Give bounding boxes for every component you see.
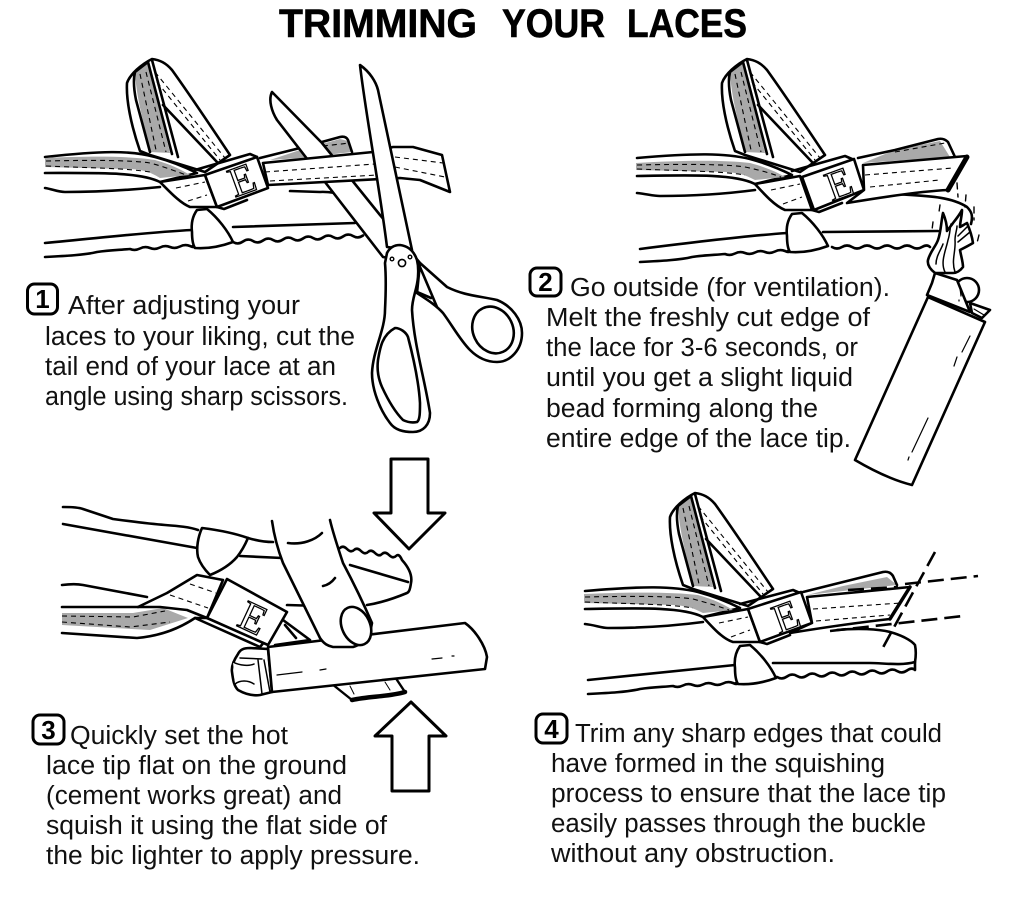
text: step 1 bbox=[45, 292, 355, 411]
badge: number 1 bbox=[28, 284, 58, 314]
panel: step 4 bbox=[536, 493, 978, 868]
text: step 3: (cement works great) and bbox=[46, 782, 342, 810]
title: LACES bbox=[627, 2, 747, 46]
text: step 2: Melt the freshly cut edge of bbox=[546, 304, 871, 332]
text: step 3: lace tip flat on the ground bbox=[46, 752, 347, 780]
badge: number 4 bbox=[536, 714, 567, 744]
text: step 2: entire edge of the lace tip. bbox=[546, 425, 851, 453]
panel: step 1 bbox=[28, 59, 522, 432]
icon: lighter flat bbox=[232, 623, 487, 695]
panel: step 3 bbox=[33, 459, 487, 870]
buckle letter: E bbox=[222, 155, 262, 207]
trim guide lines bbox=[830, 552, 978, 653]
title bbox=[279, 2, 747, 46]
text: step 2: Go outside (for ventilation). bbox=[570, 274, 890, 302]
panel: step 2 bbox=[530, 59, 990, 485]
illustration: sandal pressed under lighter bbox=[62, 507, 411, 700]
text: step 2: bead forming along the bbox=[546, 395, 818, 423]
text: step 1: laces to your liking, cut the bbox=[45, 323, 355, 351]
text: step 4: Trim any sharp edges that could bbox=[575, 720, 942, 748]
title: TRIMMING bbox=[279, 2, 477, 46]
arrow: press down bbox=[374, 459, 445, 549]
illustration: sandal with lace to cut bbox=[45, 59, 363, 257]
icon: scissors bbox=[263, 65, 522, 432]
text: step 4: process to ensure that the lace tip bbox=[551, 780, 946, 808]
badge: number 4: 4 bbox=[544, 714, 559, 744]
text: step 4: easily passes through the buckle bbox=[551, 810, 926, 838]
text: step 2: the lace for 3-6 seconds, or bbox=[546, 334, 858, 362]
buckle letter: E bbox=[766, 592, 806, 644]
illustration: sandal with squished lace tip bbox=[584, 493, 916, 694]
text: step 4 bbox=[550, 720, 946, 868]
text: step 2: until you get a slight liquid bbox=[546, 364, 853, 392]
text: step 1: tail end of your lace at an bbox=[45, 353, 336, 381]
text: step 3: squish it using the flat side of bbox=[46, 812, 388, 840]
badge: number 3 bbox=[33, 715, 64, 745]
text: step 1: angle using sharp scissors. bbox=[45, 383, 348, 411]
badge: number 3: 3 bbox=[41, 715, 56, 745]
badge: number 2 bbox=[530, 267, 561, 297]
text: step 2 bbox=[546, 274, 890, 453]
text: step 3 bbox=[46, 722, 420, 870]
buckle letter: E bbox=[231, 593, 274, 645]
arrow: press up bbox=[375, 702, 446, 791]
icon: lighter bbox=[855, 273, 990, 485]
badge: number 2: 2 bbox=[538, 267, 553, 297]
illustration: sandal with cut lace tip bbox=[636, 59, 972, 262]
icon: flame bbox=[928, 183, 979, 273]
text: step 4: have formed in the squishing bbox=[551, 750, 885, 778]
icon: finger bbox=[272, 520, 377, 650]
buckle letter: E bbox=[819, 159, 859, 211]
text: step 1: After adjusting your bbox=[68, 292, 301, 320]
text: step 4: without any obstruction. bbox=[550, 840, 835, 868]
text: step 3: Quickly set the hot bbox=[70, 722, 288, 750]
badge: number 1: 1 bbox=[35, 284, 50, 314]
title: YOUR bbox=[502, 2, 605, 46]
text: step 3: the bic lighter to apply pressure. bbox=[46, 842, 420, 870]
